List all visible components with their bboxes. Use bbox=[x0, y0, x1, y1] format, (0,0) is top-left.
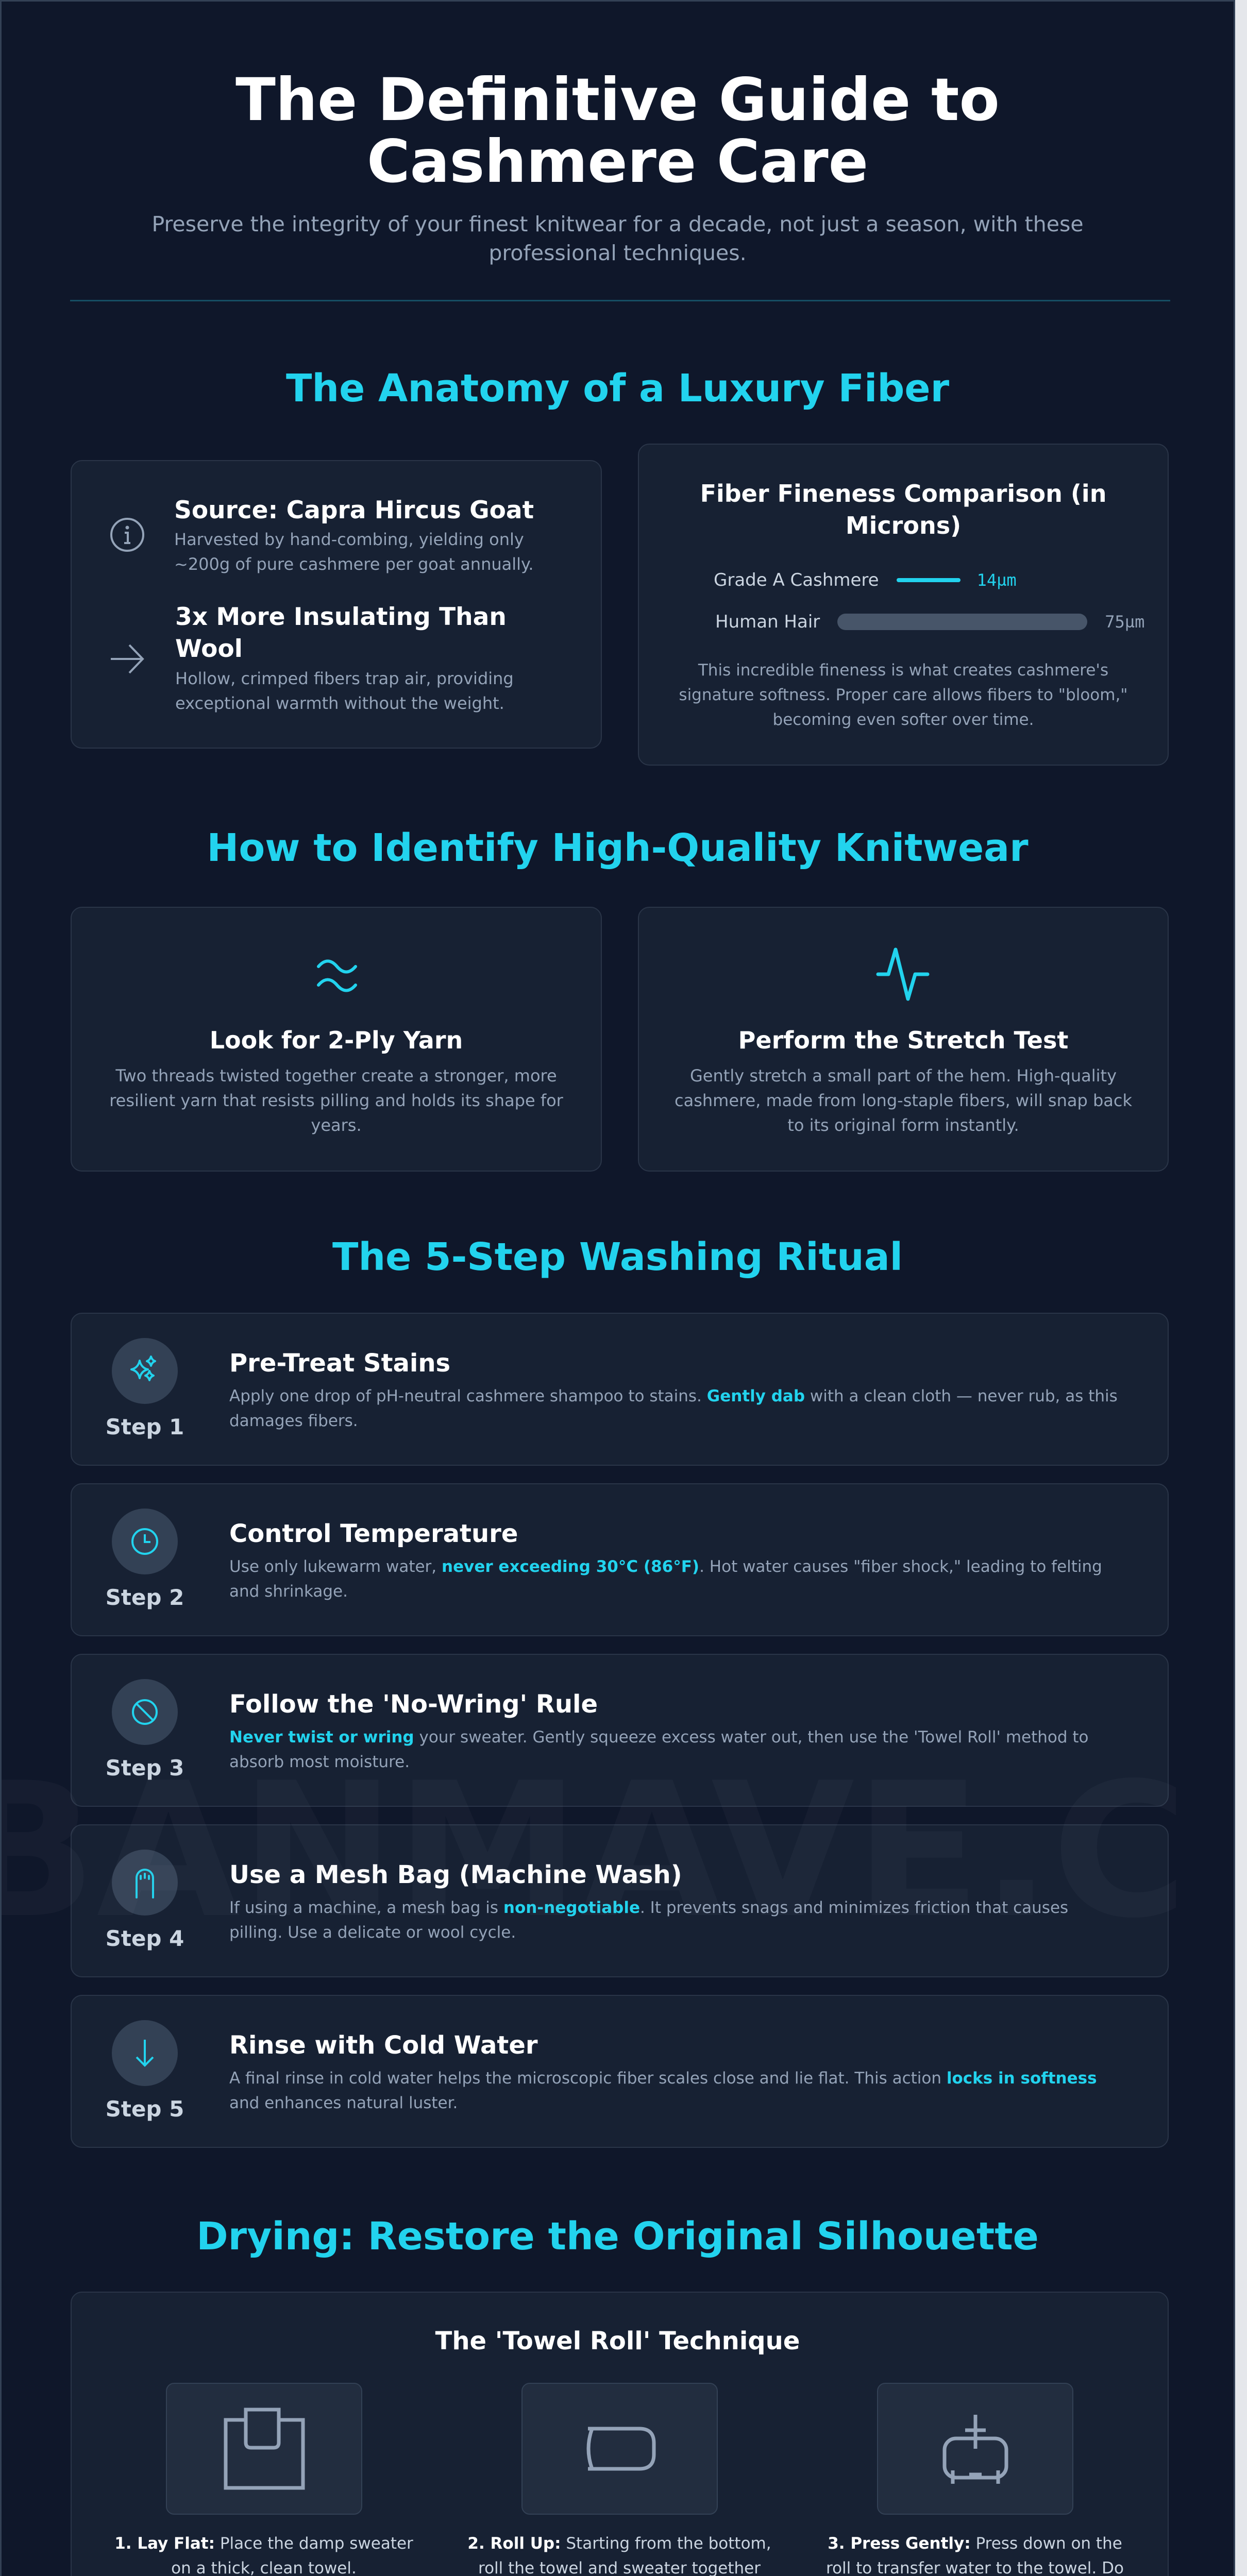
bar: cashmere: 14µm bbox=[977, 570, 1017, 590]
panel: 2-ply: years. bbox=[311, 1115, 362, 1135]
panel: 2-ply: resilient yarn that resists pilling and holds its shape for bbox=[109, 1091, 563, 1110]
chart title: Microns) bbox=[846, 512, 961, 539]
text: source: Harvested by hand-combing, yielding only bbox=[174, 530, 524, 549]
step 4: Use a Mesh Bag (Machine Wash) bbox=[229, 1860, 682, 1889]
title: Cashmere Care bbox=[367, 127, 868, 196]
chart description: This incredible fineness is what creates cashmere's bbox=[698, 661, 1108, 680]
towel roll title: The 'Towel Roll' Technique bbox=[435, 2327, 800, 2355]
icon: pulse bbox=[876, 948, 930, 1001]
subtitle: Preserve the integrity of your finest knitwear for a decade, not just a season, with these bbox=[151, 212, 1084, 236]
heading: washing: The 5-Step Washing Ritual bbox=[332, 1235, 903, 1279]
step 3: Step 3 bbox=[106, 1755, 184, 1781]
bar: cashmere: Grade A Cashmere bbox=[714, 570, 879, 590]
step 5: Rinse with Cold Water bbox=[229, 2031, 538, 2060]
text: insulating: Hollow, crimped fibers trap air, providing bbox=[175, 669, 514, 688]
panel: fiber source bbox=[71, 460, 602, 749]
step 2: Control Temperature bbox=[229, 1519, 518, 1548]
step 2: Step 2 bbox=[106, 1585, 184, 1610]
heading: identify: How to Identify High-Quality Knitwear bbox=[207, 826, 1029, 870]
title bbox=[235, 65, 1000, 196]
icon: press bbox=[877, 2383, 1073, 2515]
text: insulating: Wool bbox=[175, 635, 243, 663]
bar: cashmere bbox=[714, 570, 1017, 590]
step 5 bbox=[71, 1995, 1169, 2148]
chart title bbox=[700, 480, 1106, 539]
icon: lay flat bbox=[166, 2383, 362, 2515]
step 4 bbox=[71, 1824, 1169, 1977]
step 3: Follow the 'No-Wring' Rule bbox=[229, 1690, 598, 1719]
step 5: A final rinse in cold water helps the microscopic fiber scales close and lie flat. This action locks in softness and enhances natural luster. bbox=[229, 2069, 1097, 2112]
step 5: Step 5 bbox=[106, 2096, 184, 2122]
caption 2 bbox=[467, 2534, 771, 2576]
panel: stretch test: Perform the Stretch Test bbox=[738, 1026, 1068, 1054]
step 2: Use only lukewarm water, never exceeding 30°C (86°F). Hot water causes "fiber shock," leading to felting and shrinkage. bbox=[229, 1557, 1102, 1601]
chart title: Fiber Fineness Comparison (in bbox=[700, 480, 1106, 507]
text: insulating bbox=[175, 603, 514, 713]
step 4: If using a machine, a mesh bag is non-negotiable. It prevents snags and minimizes friction that causes pilling. Use a delicate or wool cycle. bbox=[229, 1899, 1068, 1942]
panel: towel roll bbox=[71, 2292, 1169, 2576]
icon: arrow bbox=[111, 644, 144, 674]
heading: anatomy: The Anatomy of a Luxury Fiber bbox=[286, 366, 949, 411]
panel: stretch test: cashmere, made from long-staple fibers, will snap back bbox=[675, 1091, 1132, 1110]
step 4: Step 4 bbox=[106, 1926, 184, 1951]
caption 1 bbox=[114, 2534, 413, 2576]
step 3 bbox=[71, 1654, 1169, 1807]
step 2 bbox=[71, 1483, 1169, 1636]
title: The Definitive Guide to bbox=[235, 65, 1000, 134]
caption 2: 2. Roll Up: Starting from the bottom, bbox=[467, 2534, 771, 2553]
caption 1: 1. Lay Flat: Place the damp sweater bbox=[114, 2534, 413, 2553]
step 1: Pre-Treat Stains bbox=[229, 1349, 450, 1378]
bar: human hair: 75µm bbox=[1105, 612, 1144, 632]
text: source bbox=[174, 496, 534, 574]
panel: 2-ply: Two threads twisted together create a stronger, more bbox=[115, 1066, 557, 1086]
chart description: signature softness. Proper care allows fibers to "bloom," bbox=[679, 686, 1128, 704]
caption 3 bbox=[826, 2534, 1124, 2576]
bar: human hair bbox=[715, 612, 1144, 632]
icon: info bbox=[110, 518, 144, 552]
step 3: Never twist or wring your sweater. Gently squeeze excess water out, then use the 'Towel Roll' method to absorb most moisture. bbox=[229, 1728, 1089, 1771]
icon: waves bbox=[317, 959, 357, 992]
text: insulating: 3x More Insulating Than bbox=[175, 603, 507, 631]
icon: roll up bbox=[521, 2383, 718, 2515]
step 1 bbox=[71, 1313, 1169, 1466]
text: source: Source: Capra Hircus Goat bbox=[174, 496, 534, 524]
panel: fiber fineness chart bbox=[638, 444, 1169, 766]
chart description: becoming even softer over time. bbox=[773, 710, 1034, 729]
bar: human hair: Human Hair bbox=[715, 612, 820, 632]
panel: stretch test: Gently stretch a small part of the hem. High-quality bbox=[690, 1066, 1117, 1086]
text: insulating: exceptional warmth without the weight. bbox=[175, 693, 504, 713]
step 1: Apply one drop of pH-neutral cashmere shampoo to stains. Gently dab with a clean cloth — never rub, as this damages fibers. bbox=[229, 1387, 1118, 1430]
step 1: Step 1 bbox=[106, 1414, 184, 1439]
subtitle: professional techniques. bbox=[488, 241, 747, 265]
caption 3: 3. Press Gently: Press down on the bbox=[828, 2534, 1122, 2553]
panel: stretch test: to its original form instantly. bbox=[787, 1115, 1019, 1135]
chart description bbox=[679, 661, 1128, 729]
panel: 2-ply: Look for 2-Ply Yarn bbox=[210, 1026, 463, 1054]
panel: 2-ply bbox=[71, 907, 602, 1172]
text: source: ~200g of pure cashmere per goat annually. bbox=[174, 554, 534, 574]
subtitle bbox=[151, 212, 1084, 265]
panel: stretch test bbox=[638, 907, 1169, 1172]
heading: drying: Drying: Restore the Original Silhouette bbox=[196, 2214, 1039, 2259]
